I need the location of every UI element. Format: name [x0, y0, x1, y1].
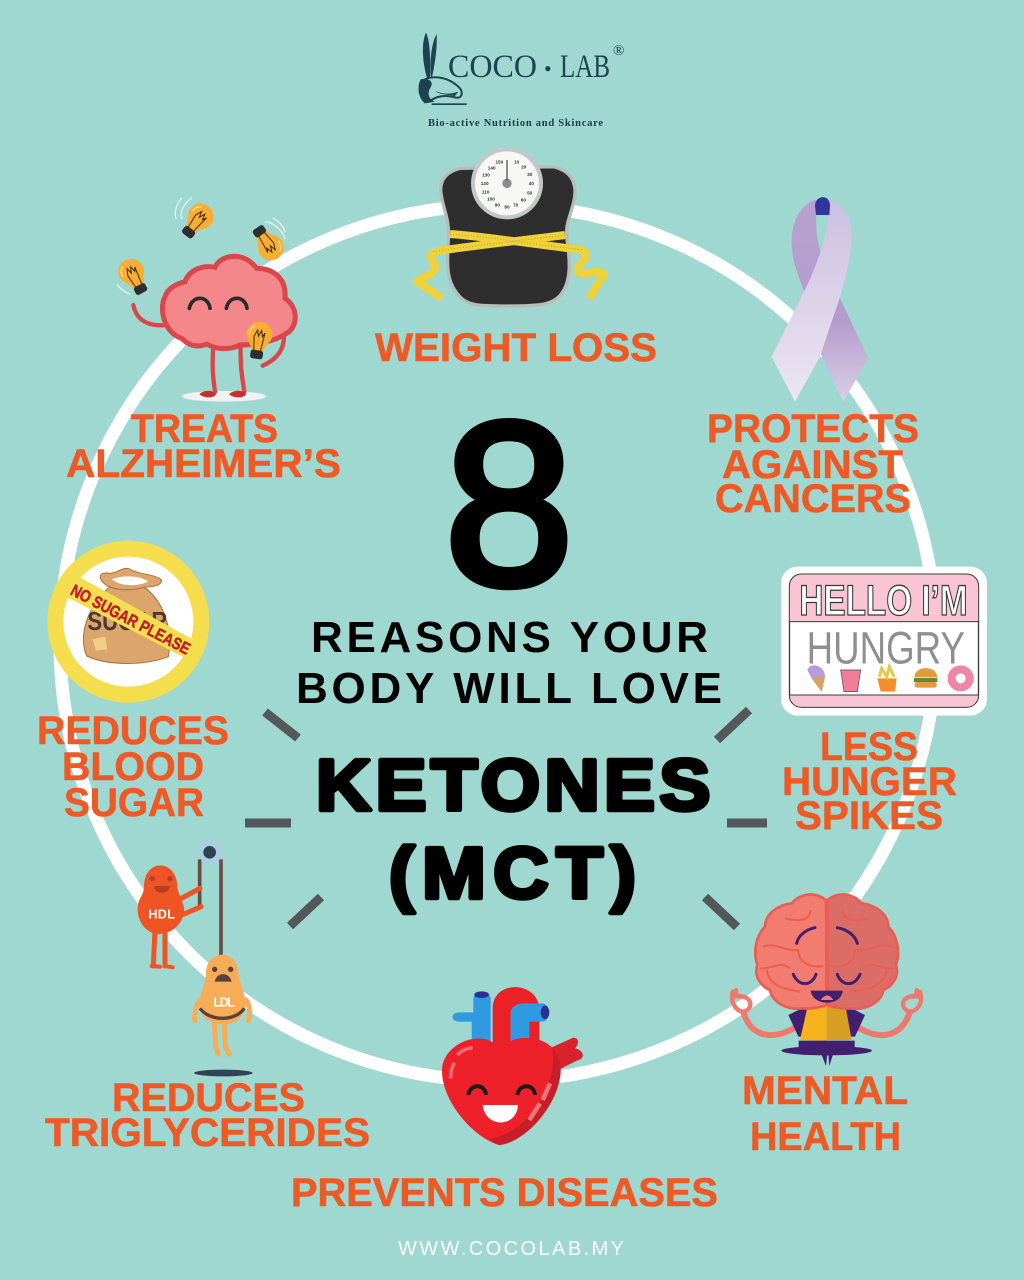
- icon: weighing scale with tape: 70: [513, 202, 519, 207]
- title: ketones (MCT): KETONES: [316, 745, 710, 826]
- icon: weighing scale with tape: 130: [482, 173, 490, 178]
- heading: less hunger spikes: HUNGER: [782, 760, 957, 804]
- icon: weighing scale with tape: 50: [527, 190, 533, 195]
- heading: protects against cancers: PROTECTS: [707, 407, 919, 451]
- icon: weighing scale with tape: 80: [504, 204, 510, 209]
- logo: Coco Lab: Bio-active Nutrition and Skincare: [428, 118, 603, 129]
- icon: no sugar sign: NO SUGAR PLEASE: [67, 581, 193, 658]
- heading: reduces triglycerides: [45, 1076, 370, 1155]
- heading: protects against cancers: [707, 407, 919, 521]
- subtitle: reasons your body will love: [296, 613, 722, 713]
- icon: no sugar sign: [55, 549, 201, 695]
- logo: Coco Lab: COCO: [448, 49, 537, 85]
- logo: Coco Lab: •: [544, 56, 552, 81]
- icon: weighing scale with tape: 140: [488, 165, 496, 170]
- icon: smiling heart: [442, 987, 583, 1145]
- icon: no sugar sign: SUGAR: [87, 606, 168, 636]
- icon: weighing scale with tape: 90: [495, 202, 500, 207]
- icon: hello I'm hungry badge: HELLO I’M: [799, 577, 968, 625]
- title: ketones (MCT): [316, 745, 710, 914]
- icon: weighing scale with tape: 100: [487, 197, 495, 202]
- heading: reduces triglycerides: REDUCES: [112, 1076, 305, 1120]
- icon: weighing scale with tape: 40: [529, 181, 534, 186]
- icon: weighing scale with tape: 110: [482, 190, 490, 195]
- icon: weighing scale with tape: 150: [495, 160, 504, 165]
- white ring: [60, 205, 936, 1081]
- heading: prevents diseases: PREVENTS DISEASES: [291, 1171, 718, 1215]
- icon: weighing scale with tape: [417, 147, 604, 306]
- icon: weighing scale with tape: 120: [481, 181, 489, 186]
- heading: treats alzheimer's: ALZHEIMER’S: [66, 442, 341, 486]
- heading: treats alzheimer's: TREATS: [131, 407, 278, 451]
- logo: Coco Lab: [419, 33, 624, 129]
- icon: HDL and LDL characters on pulley: HDL: [148, 908, 175, 922]
- icon: weighing scale with tape: 30: [527, 172, 533, 177]
- icon: meditating brain: [732, 894, 921, 1066]
- heading: mental health: [742, 1069, 908, 1159]
- icon: awareness ribbon: [772, 197, 868, 402]
- icon: HDL and LDL characters on pulley: [138, 840, 253, 1076]
- logo: Coco Lab: LAB: [560, 49, 610, 85]
- heading: mental health: HEALTH: [750, 1115, 901, 1159]
- title: ketones (MCT): (MCT): [389, 833, 636, 914]
- heading: reduces blood sugar: REDUCES: [37, 709, 229, 753]
- heading: less hunger spikes: [782, 725, 957, 838]
- big number 8: 8: [444, 375, 574, 634]
- heading: protects against cancers: AGAINST: [722, 443, 903, 487]
- subtitle: reasons your body will love: REASONS YOUR: [311, 613, 708, 662]
- burst ticks: [245, 710, 767, 927]
- heading: reduces blood sugar: SUGAR: [64, 781, 204, 825]
- heading: reduces triglycerides: TRIGLYCERIDES: [45, 1111, 370, 1155]
- icon: juggling brain: [114, 198, 295, 402]
- subtitle: reasons your body will love: BODY WILL LOVE: [296, 664, 722, 713]
- heading: weight loss: WEIGHT LOSS: [375, 326, 657, 370]
- heading: less hunger spikes: SPIKES: [795, 794, 943, 838]
- icon: hello I'm hungry badge: HUNGRY: [807, 622, 965, 673]
- logo: Coco Lab: ®: [613, 43, 624, 59]
- icon: hello I'm hungry badge: [781, 567, 987, 716]
- heading: reduces blood sugar: [37, 709, 229, 825]
- icon: weighing scale with tape: 10: [514, 159, 520, 164]
- heading: mental health: MENTAL: [742, 1069, 908, 1113]
- icon: weighing scale with tape: 20: [521, 165, 527, 170]
- website url: WWW.COCOLAB.MY: [398, 1238, 624, 1260]
- icon: weighing scale with tape: 60: [521, 197, 526, 202]
- heading: treats alzheimer's: [66, 407, 341, 486]
- heading: reduces blood sugar: BLOOD: [62, 745, 204, 789]
- heading: less hunger spikes: LESS: [820, 725, 918, 769]
- heading: protects against cancers: CANCERS: [715, 477, 911, 521]
- icon: HDL and LDL characters on pulley: LDL: [213, 996, 235, 1010]
